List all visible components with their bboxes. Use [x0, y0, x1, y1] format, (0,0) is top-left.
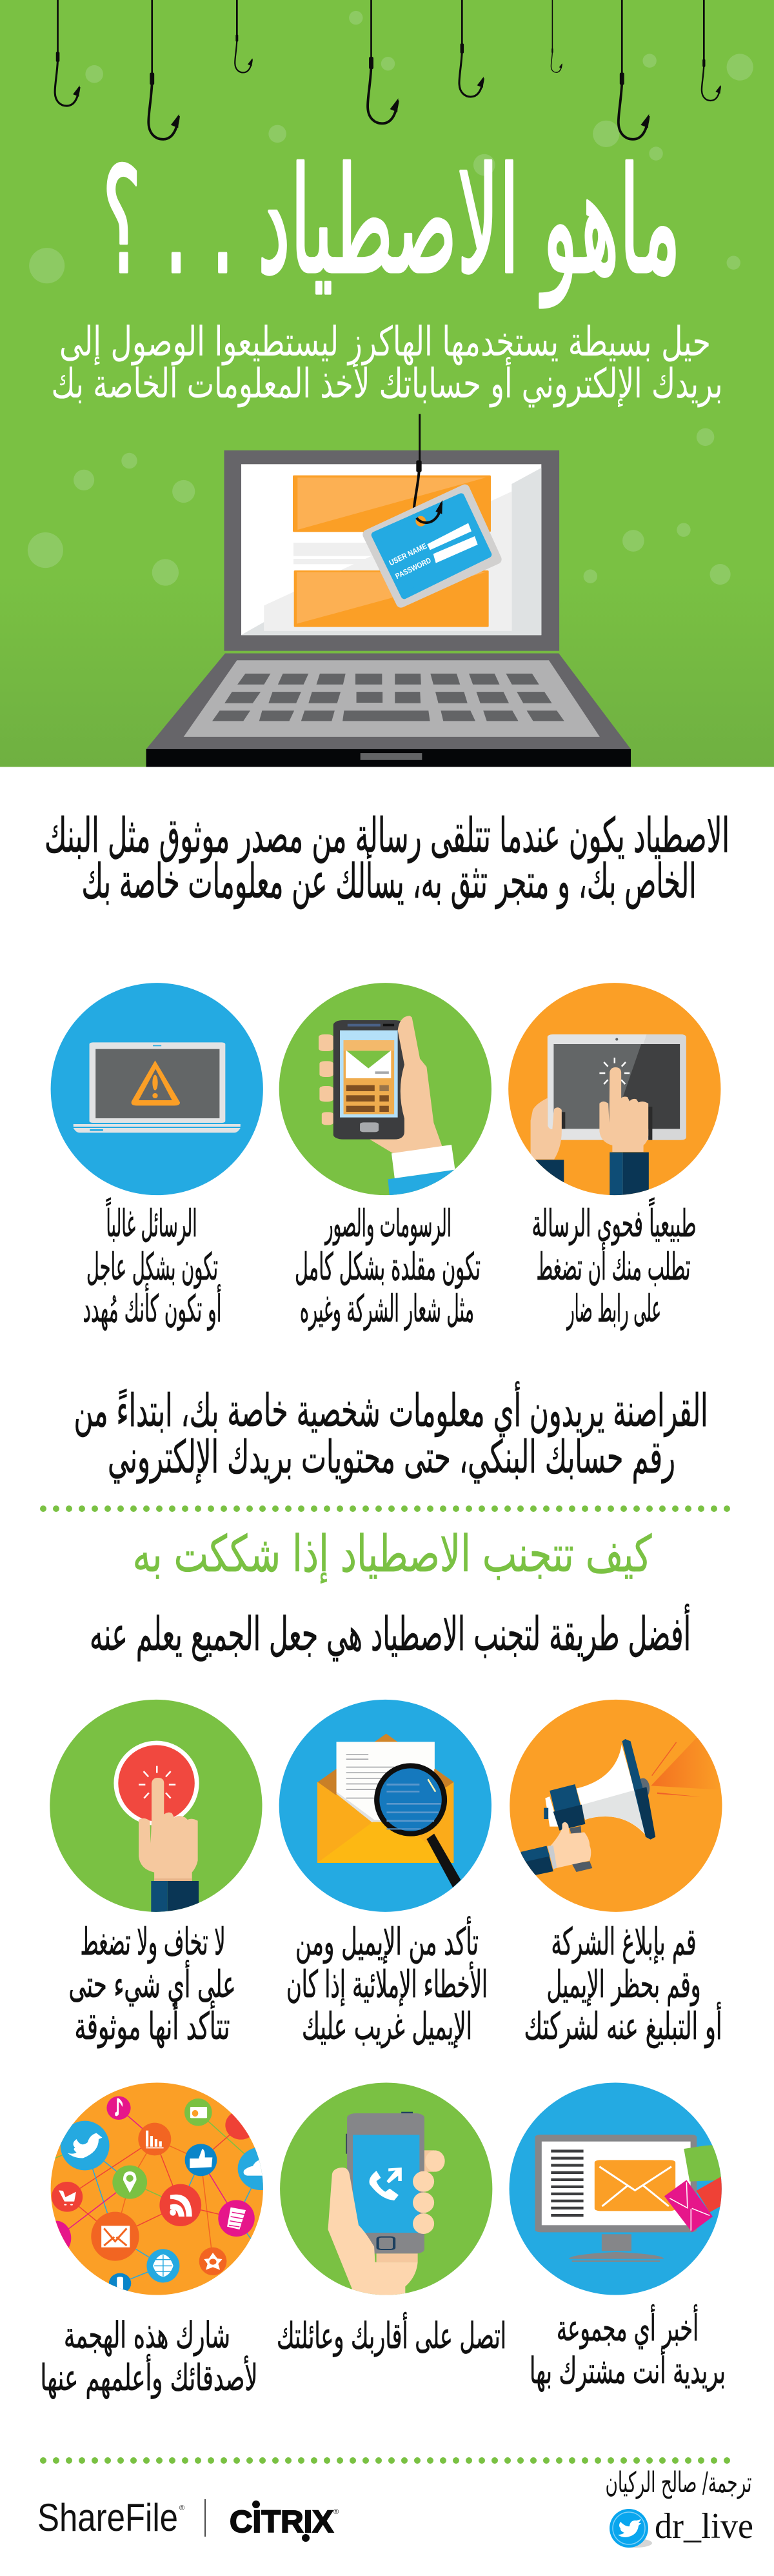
captions: avoidance row one [68, 1916, 722, 2049]
caption: share [40, 2315, 258, 2399]
icon: social network [50, 2083, 263, 2295]
background bubbles [28, 11, 753, 586]
icon: envelope and magnifier [279, 1700, 491, 1912]
caption: messages: الرسائل غالباً [106, 1197, 197, 1246]
logo: ShareFile: ShareFile [37, 2496, 178, 2539]
icon: phone call in hand [280, 2082, 492, 2299]
login card: PASSWORD [394, 556, 433, 581]
login card: USER NAME [388, 541, 428, 567]
icon: red button press [50, 1700, 263, 1915]
caption: message content [531, 1197, 697, 1331]
icon: phone in hand [279, 983, 492, 1198]
captions: warning signs: مثل شعار الشركة وغيره [300, 1287, 474, 1331]
caption: do not press: لا تخاف ولا تضغط [80, 1920, 226, 1964]
twitter handle [610, 2506, 753, 2548]
captions: warning signs: تكون مقلدة بشكل كامل [295, 1245, 481, 1289]
laptop screen with login card on hook [241, 414, 541, 635]
caption: check email [286, 1916, 488, 2049]
hero subtitle [52, 318, 722, 408]
icon: monitor with envelopes [510, 2082, 725, 2295]
logo: Citrix: ® [333, 2508, 339, 2516]
caption: graphics [295, 1202, 481, 1331]
logo: ShareFile: ® [179, 2504, 184, 2512]
icon: tablet touch [508, 983, 720, 1198]
twitter handle: dr_live [655, 2506, 753, 2546]
captions: warning signs: أو تكون كأنك مُهدد [83, 1283, 222, 1331]
caption: check email: الأخطاء الإملائية إذا كان [286, 1961, 488, 2007]
caption: do not press [68, 1920, 236, 2049]
panel: avoidance icons row two [39, 2082, 725, 2299]
logo: Citrix: CITRIX [230, 2505, 333, 2539]
hero panel [0, 0, 774, 767]
caption: do not press: على أي شيء حتى [68, 1960, 236, 2007]
captions: warning signs: تكون بشكل عاجل [86, 1245, 218, 1289]
caption: share: لأصدقائك وأعلمهم عنها [40, 2354, 258, 2399]
intro paragraph [45, 808, 729, 909]
caption: check email: الإيميل غريب عليك [302, 2004, 472, 2049]
icon: laptop warning [51, 983, 263, 1195]
login card [368, 489, 497, 603]
hanging fish hooks [55, 0, 720, 139]
laptop base and keyboard [146, 450, 631, 767]
hackers paragraph [74, 1381, 708, 1484]
panel: avoidance icons row one [50, 1700, 723, 1915]
panel: warning signs icons [51, 983, 720, 1198]
caption: do not press: تتأكد أنها موثوقة [75, 2000, 230, 2049]
caption: messages [83, 1197, 222, 1331]
caption: graphics: الرسومات والصور [324, 1202, 452, 1246]
caption: check email: تأكد من الإيميل ومن [295, 1916, 479, 1964]
music note [115, 2098, 123, 2116]
caption: call relatives: اتصل على أقاربك وعائلتك [277, 2312, 506, 2357]
caption: share: شارك هذه الهجمة [64, 2315, 230, 2357]
captions: warning signs [83, 1197, 697, 1331]
icon: megaphone [510, 1700, 723, 1912]
captions: avoidance row two [40, 2304, 726, 2399]
caption: tell mailing lists [530, 2304, 726, 2392]
caption: report [524, 1920, 722, 2049]
